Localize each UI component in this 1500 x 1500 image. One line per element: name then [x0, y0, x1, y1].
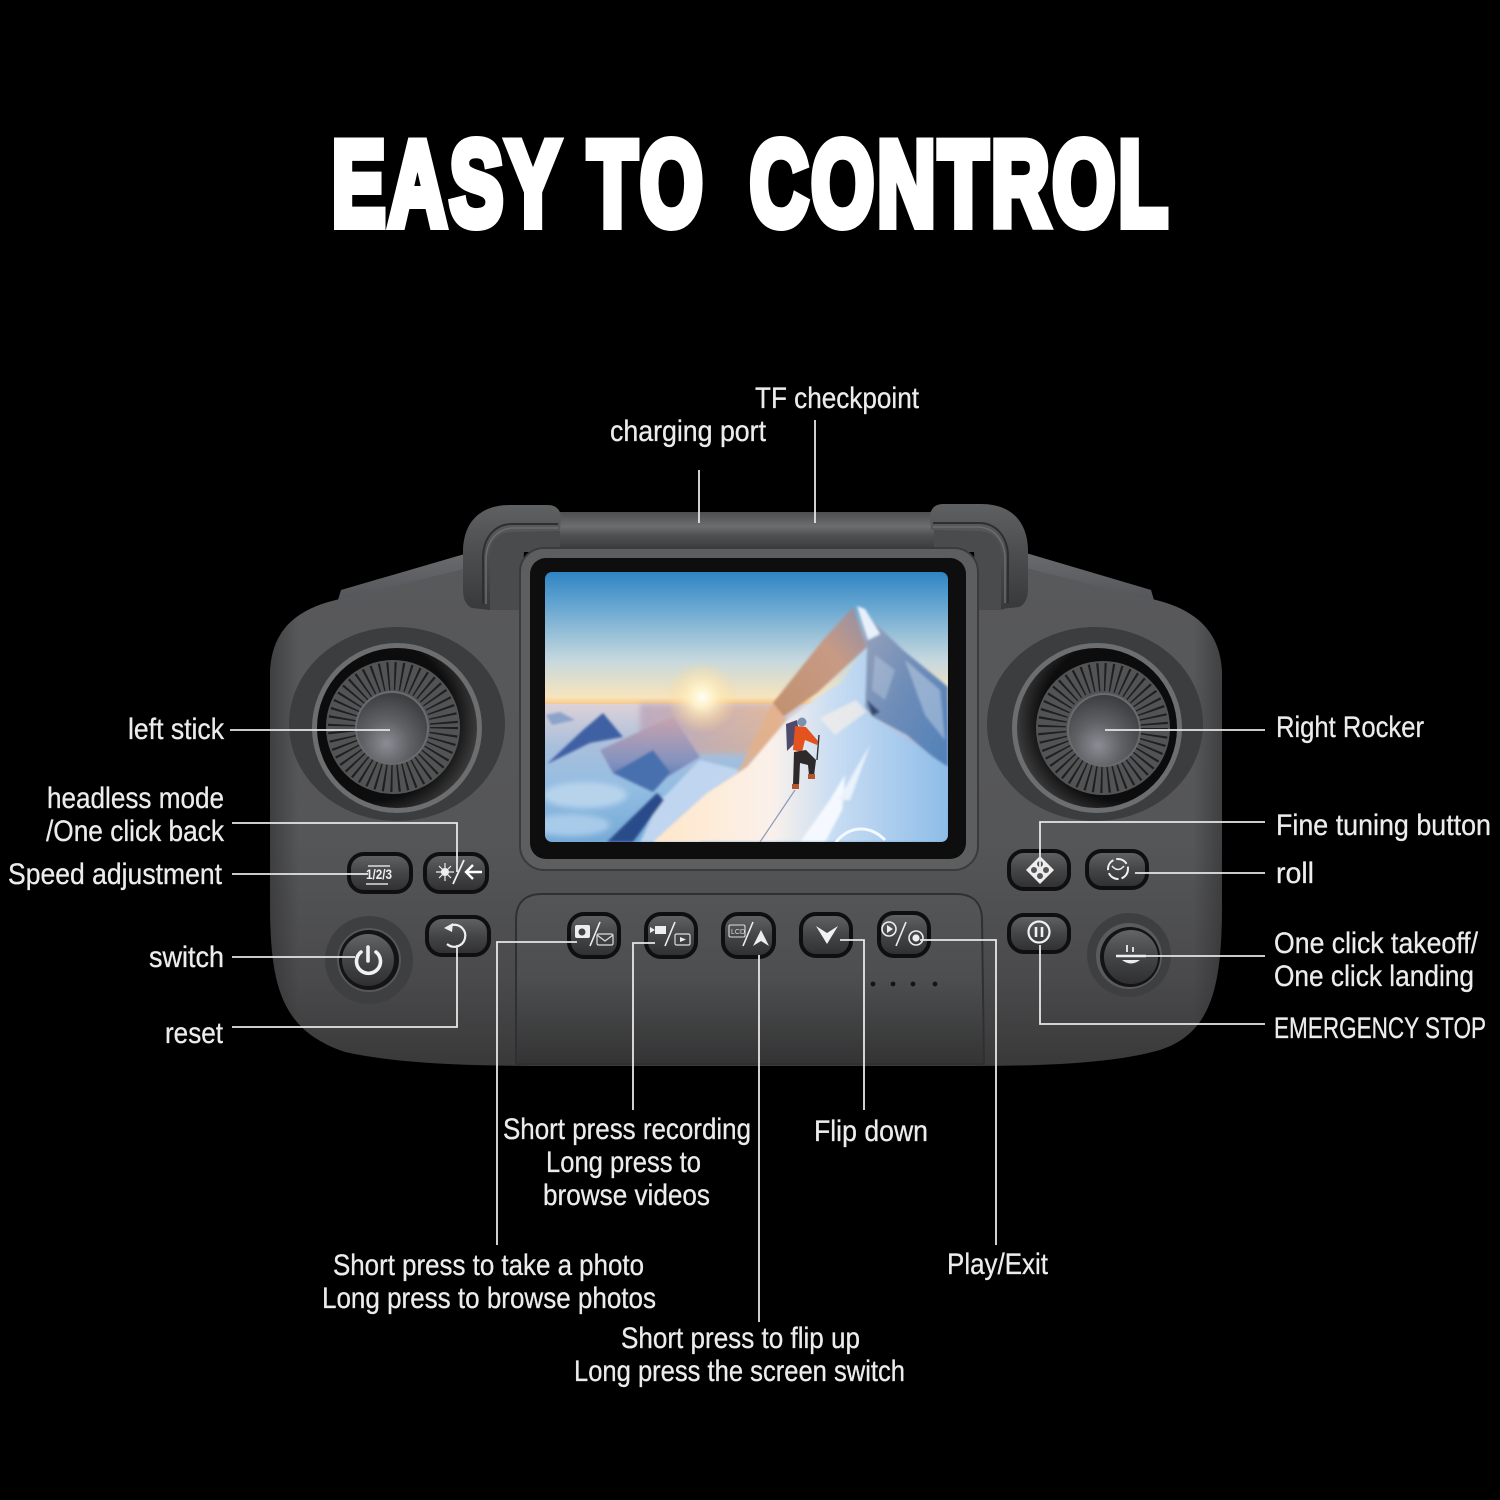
callout: short press recording [503, 943, 751, 1212]
callout: one click takeoff and landing [1145, 927, 1479, 993]
left grip arch [463, 505, 561, 610]
title: CONTROL [750, 117, 1171, 251]
callout: flip down: Flip down [814, 1115, 928, 1148]
screen bezel [520, 548, 978, 870]
right stick [987, 627, 1203, 821]
button: photo [569, 914, 619, 957]
callout: charging port: charging port [610, 415, 767, 448]
button: speed adjustment: 1/2/3 [366, 866, 392, 882]
button: takeoff and landing [1087, 913, 1171, 997]
button: flip down [801, 914, 851, 956]
title [332, 117, 1171, 251]
callout: short press recording: Short press recording [503, 1113, 751, 1146]
right grip arch [930, 504, 1028, 609]
callout: play and exit: Play/Exit [947, 1248, 1049, 1281]
callout: flip up and screen switch: Long press the screen switch [574, 1355, 905, 1388]
left stick [289, 627, 505, 821]
button: video [646, 914, 696, 957]
controller body [270, 568, 1222, 1066]
callout: fine tuning button [1040, 809, 1491, 870]
callout: one click takeoff and landing: One click takeoff/ [1274, 927, 1479, 960]
button: emergency stop [1009, 915, 1069, 952]
callout: take a photo [322, 942, 656, 1315]
callout: emergency stop [1040, 945, 1486, 1045]
button: LCD / flip up: LCD [731, 929, 745, 936]
callout: TF checkpoint: TF checkpoint [755, 382, 920, 415]
callout: short press recording: Long press to [546, 1146, 701, 1179]
button: power [325, 916, 413, 1004]
title: EASY [332, 117, 563, 251]
callout: take a photo: Short press to take a photo [333, 1249, 644, 1282]
callout: headless mode: /One click back [46, 815, 225, 848]
button: fine tuning [1009, 851, 1069, 889]
shoulders [338, 553, 1154, 600]
callout: roll: roll [1276, 857, 1314, 890]
speaker dots [871, 982, 937, 986]
lower button panel [516, 894, 984, 1064]
button: speed adjustment [349, 854, 411, 892]
button: reset [427, 917, 489, 955]
button: LCD / flip up [723, 914, 774, 957]
callout: right rocker: Right Rocker [1276, 711, 1424, 744]
screen frame [530, 558, 966, 859]
callout: one click takeoff and landing: One click landing [1274, 960, 1474, 993]
callout: headless mode [46, 782, 457, 872]
climber [786, 718, 819, 789]
shaded area under grips [488, 530, 1004, 610]
button: roll [1087, 851, 1147, 888]
callout: headless mode: headless mode [47, 782, 224, 815]
callout: reset [165, 945, 457, 1050]
callout: play and exit [920, 940, 1049, 1281]
top bar [556, 512, 938, 548]
button: play / exit [879, 913, 929, 956]
callout: short press recording: browse videos [543, 1179, 710, 1212]
screen image: climber on mountain [530, 572, 948, 844]
callout: reset: reset [165, 1017, 224, 1050]
callout: flip up and screen switch [574, 955, 905, 1388]
callout: speed adjustment: Speed adjustment [8, 858, 223, 891]
controller [270, 504, 1222, 1066]
button: headless mode [425, 854, 487, 892]
callout: take a photo: Long press to browse photos [322, 1282, 656, 1315]
title: TO [588, 117, 706, 251]
callout: flip up and screen switch: Short press to flip up [621, 1322, 860, 1355]
callout: left stick: left stick [128, 713, 225, 746]
callout: switch: switch [149, 941, 224, 974]
callout: flip down [814, 940, 928, 1148]
